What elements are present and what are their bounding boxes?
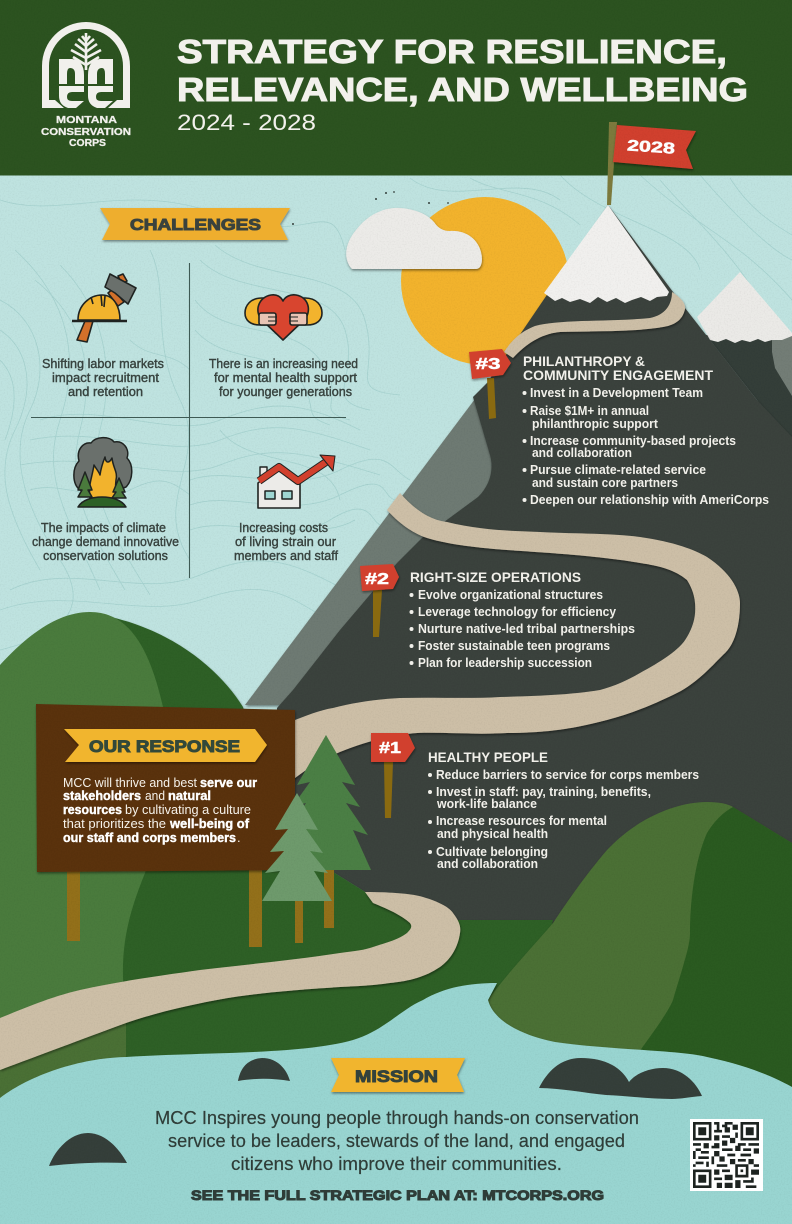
panel: our response text: by cultivating a culture	[125, 802, 251, 817]
panel: #3 philanthropy and community engagement: PHILANTHROPY &	[523, 353, 645, 369]
panel: #1 healthy people: and collaboration	[437, 856, 538, 871]
marker #3: #3	[476, 356, 501, 373]
challenge: cost of living: Increasing costs	[239, 520, 328, 535]
left and centre hills	[0, 612, 553, 1110]
panel: #1 healthy people: Cultivate belonging	[436, 844, 548, 859]
panel: #1 healthy people: HEALTHY PEOPLE	[428, 749, 548, 765]
marker #2	[360, 564, 399, 637]
mission statement: MCC Inspires young people through hands-on conservation	[155, 1108, 639, 1128]
banner: our response: OUR RESPONSE	[89, 737, 240, 756]
panel: #3 philanthropy and community engagement: and sustain core partners	[532, 475, 678, 490]
logo: Montana Conservation Corps	[41, 22, 131, 149]
challenge: cost of living	[234, 455, 338, 563]
front pine tree	[262, 793, 332, 943]
rocks	[49, 1058, 702, 1166]
lower road	[0, 892, 460, 1070]
marker #3	[469, 349, 511, 419]
title: STRATEGY FOR RESILIENCE,	[177, 33, 727, 70]
flag: 2028	[607, 122, 696, 205]
panel: our response text: that prioritizes the	[63, 816, 166, 831]
lake: mission panel background	[0, 983, 792, 1224]
sign board	[36, 704, 295, 872]
cloud	[346, 208, 482, 269]
panel: #3 philanthropy and community engagement: and collaboration	[532, 445, 632, 460]
panel: our response text: and	[145, 788, 165, 803]
panel: #1 healthy people	[371, 733, 699, 871]
marker #1: #1	[379, 740, 401, 757]
middle road	[290, 493, 740, 782]
title	[177, 33, 748, 108]
icon: wildfire	[74, 438, 132, 507]
call to action: strategic plan url: SEE THE FULL STRATEGIC PLAN AT: MTCORPS.ORG	[191, 1188, 604, 1203]
panel: #3 philanthropy and community engagement: Pursue climate-related service	[530, 462, 706, 477]
main mountain snow cap	[544, 205, 669, 303]
logo: Montana Conservation Corps: CORPS	[69, 137, 106, 149]
panel: #3 philanthropy and community engagement: Deepen our relationship with AmeriCorps	[530, 492, 769, 507]
panel: our response text: MCC will thrive and best	[63, 775, 197, 790]
panel: #2 right-size operations	[360, 564, 635, 670]
panel: #1 healthy people: Increase resources for mental	[436, 813, 607, 828]
challenge: cost of living: members and staff	[234, 548, 338, 563]
grey ridge of main mountain	[245, 380, 510, 705]
main mountain	[277, 205, 792, 925]
header band	[0, 0, 792, 176]
banner: mission	[331, 1058, 465, 1092]
challenge: mental health: for younger generations	[219, 384, 352, 399]
right hills	[470, 802, 792, 1100]
flag: 2028: 2028	[626, 137, 676, 158]
back pine tree	[281, 735, 371, 928]
panel: our response text: natural	[168, 788, 211, 803]
challenge: labor markets: Shifting labor markets	[42, 356, 164, 371]
challenge: labor markets: and retention	[68, 384, 143, 399]
panel: our response text: our staff and corps members	[63, 830, 236, 845]
challenge: climate change	[32, 438, 179, 563]
panel: #2 right-size operations: Nurture native-led tribal partnerships	[418, 621, 635, 636]
panel: #3 philanthropy and community engagement: Increase community-based projects	[530, 433, 736, 448]
challenge: labor markets: impact recruitment	[52, 370, 159, 385]
panel: #3 philanthropy and community engagement: Invest in a Development Team	[530, 385, 703, 400]
title: RELEVANCE, AND WELLBEING	[177, 71, 748, 108]
panel: our response text: stakeholders	[63, 788, 141, 803]
panel: #1 healthy people: work-life balance	[436, 796, 537, 811]
sun	[401, 197, 569, 365]
marker #2: #2	[365, 571, 389, 588]
panel: #2 right-size operations: RIGHT-SIZE OPERATIONS	[410, 569, 581, 585]
icon: hard hat and axe	[72, 274, 136, 342]
mission statement: service to be leaders, stewards of the land, and engaged	[168, 1131, 625, 1151]
panel: #2 right-size operations: Leverage technology for efficiency	[418, 604, 617, 619]
panel: #2 right-size operations: Plan for leadership succession	[418, 655, 592, 670]
far mountain	[697, 272, 792, 450]
panel: our response text: serve our	[200, 775, 257, 790]
challenge: climate change: The impacts of climate	[41, 520, 166, 535]
panel: our response text	[63, 729, 267, 845]
icon: hands holding heart	[245, 295, 322, 340]
panel: #3 philanthropy and community engagement: philanthropic support	[532, 416, 659, 431]
subtitle: years: 2024 - 2028	[177, 110, 316, 135]
panel: #1 healthy people: Invest in staff: pay, training, benefits,	[436, 784, 651, 799]
logo: Montana Conservation Corps: CONSERVATION	[41, 126, 131, 138]
panel: #2 right-size operations: Foster sustainable teen programs	[418, 638, 610, 653]
panel: our response text: .	[237, 830, 241, 845]
panel: #3 philanthropy and community engagement: Raise $1M+ in annual	[530, 403, 649, 418]
panel: #2 right-size operations: Evolve organizational structures	[418, 587, 603, 602]
sign posts	[67, 870, 262, 947]
challenge: cost of living: of living strain our	[235, 534, 337, 549]
challenge: labor markets	[42, 274, 164, 399]
banner: challenges: CHALLENGES	[130, 217, 261, 234]
panel: #1 healthy people: and physical health	[437, 826, 548, 841]
challenge: mental health	[209, 295, 358, 399]
panel: #1 healthy people: Reduce barriers to service for corps members	[436, 767, 699, 782]
challenge: mental health: for mental health support	[214, 370, 357, 385]
upper road	[504, 292, 685, 358]
mission statement	[155, 1108, 639, 1174]
QR code	[690, 1119, 763, 1191]
logo: Montana Conservation Corps: MONTANA	[56, 114, 117, 126]
panel: our response text: well-being of	[169, 816, 250, 831]
mission statement: citizens who improve their communities.	[231, 1154, 562, 1174]
banner: our response	[64, 729, 267, 762]
banner: challenges	[100, 208, 290, 240]
marker #1	[371, 733, 415, 818]
panel: #3 philanthropy and community engagement	[469, 349, 769, 507]
banner: mission: MISSION	[355, 1067, 438, 1086]
challenge: climate change: conservation solutions	[43, 548, 168, 563]
panel: our response text: resources	[63, 802, 122, 817]
icon: house with rising arrow	[258, 455, 335, 508]
panel: #3 philanthropy and community engagement: COMMUNITY ENGAGEMENT	[523, 367, 713, 383]
challenge: mental health: There is an increasing need	[209, 356, 358, 371]
challenge: climate change: change demand innovative	[32, 534, 179, 549]
